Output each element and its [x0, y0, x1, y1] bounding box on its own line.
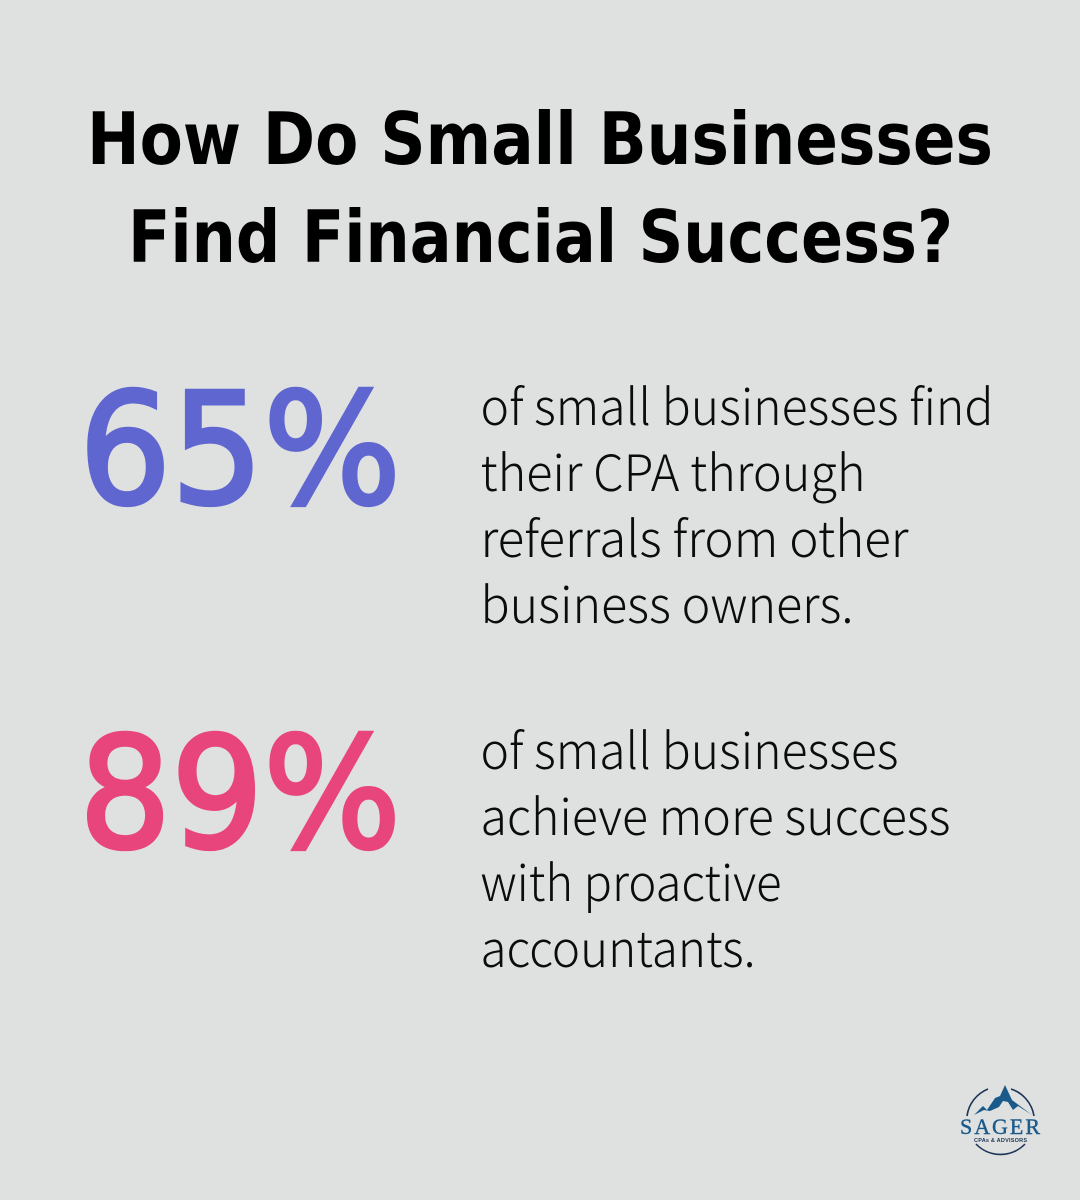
stat text: CPA referrals: their CPA through [480, 434, 866, 506]
logo: Sager CPAs & Advisors: SAGER [960, 1114, 1040, 1139]
logo: Sager CPAs & Advisors [960, 1085, 1040, 1154]
stat text: CPA referrals: business owners. [480, 566, 854, 638]
stat text: proactive accountants: of small businesses [480, 712, 898, 784]
stat text: CPA referrals: referrals from other [480, 500, 910, 572]
title [87, 97, 993, 279]
stat text: CPA referrals [480, 368, 994, 638]
stat text: proactive accountants: with proactive [480, 844, 782, 916]
stat text: proactive accountants: achieve more success [480, 778, 950, 850]
stat: 65%: 65% [79, 361, 401, 540]
stat text: proactive accountants: accountants. [480, 910, 756, 982]
title: Find Financial Success? [128, 195, 953, 279]
stat text: CPA referrals: of small businesses find [480, 368, 994, 440]
logo: Sager CPAs & Advisors: CPAs & ADVISORS [974, 1138, 1027, 1144]
stat text: proactive accountants [480, 712, 950, 982]
stat: 89%: 89% [79, 705, 401, 884]
